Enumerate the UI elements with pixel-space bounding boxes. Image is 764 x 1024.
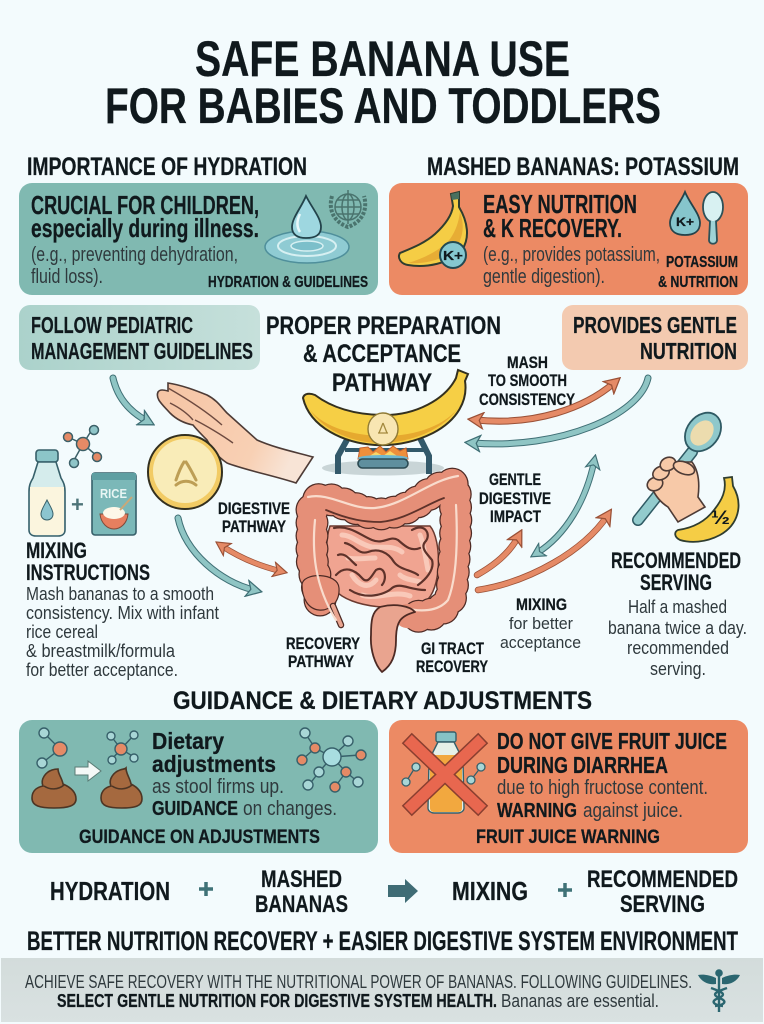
- icon: hand: [157, 383, 313, 483]
- warning text: DURING DIARRHEA: [497, 752, 668, 778]
- plus sign: +: [71, 492, 84, 517]
- heading: pathway: PATHWAY: [332, 369, 432, 397]
- arrow: nutrition return: [473, 378, 648, 444]
- mixing instructions heading: MIXING: [26, 538, 87, 563]
- hydration caption: HYDRATION & GUIDELINES: [208, 274, 368, 291]
- formula: mixing: MIXING: [452, 876, 528, 906]
- icon: hand with spoon: [638, 406, 739, 542]
- callout: follow pediatric guidelines: [19, 305, 260, 370]
- mixing instructions text: consistency. Mix with infant: [26, 602, 219, 623]
- spoon: [638, 406, 729, 520]
- icon: molecule left of bottle: [402, 763, 420, 786]
- small intestine: [327, 526, 438, 607]
- label: GI tract recovery: GI TRACT: [421, 640, 484, 658]
- icon: molecule right of bottle: [467, 763, 485, 784]
- warning text: [497, 728, 727, 822]
- icon: spoon: [703, 192, 723, 244]
- footer text: Bananas are essential.: [501, 991, 659, 1011]
- label: mash to smooth: TO SMOOTH: [488, 372, 567, 390]
- footer text: SELECT GENTLE NUTRITION FOR DIGESTIVE SYSTEM HEALTH.: [57, 991, 497, 1011]
- mixing instructions text: for better acceptance.: [26, 659, 178, 680]
- footer band: [1, 958, 763, 1022]
- callout: provides gentle nutrition: NUTRITION: [640, 338, 737, 364]
- heading: importance of hydration: IMPORTANCE OF HYDRATION: [27, 153, 307, 181]
- mixing instructions heading: [26, 538, 150, 585]
- arrow: slice to intestine: [178, 518, 254, 590]
- warning text: against juice.: [583, 800, 683, 822]
- label: recovery pathway: RECOVERY: [286, 635, 360, 653]
- callout: follow pediatric guidelines: FOLLOW PEDIATRIC: [31, 312, 193, 338]
- warning caption: FRUIT JUICE WARNING: [476, 827, 660, 848]
- icon: stool before: [32, 769, 76, 808]
- formula: hydration: HYDRATION: [50, 876, 170, 906]
- arrow: digestive pathway: [222, 546, 280, 571]
- icon: molecule small right: [107, 731, 138, 764]
- mixing instructions text: Mash bananas to a smooth: [26, 583, 214, 604]
- label: gentle digestive impact: GENTLE: [489, 471, 541, 489]
- label: recovery pathway: PATHWAY: [288, 653, 354, 671]
- heading: guidance: GUIDANCE & DIETARY ADJUSTMENTS: [173, 687, 592, 715]
- dietary text: [152, 728, 337, 820]
- icon: molecule network: [297, 728, 366, 792]
- arrow: gentle impact: [477, 537, 518, 575]
- dietary text: adjustments: [152, 751, 276, 777]
- potassium headline: [483, 189, 637, 243]
- icon: white arrow: [75, 761, 101, 781]
- banana slice: [368, 413, 398, 445]
- callout: follow pediatric guidelines: MANAGEMENT GUIDELINES: [31, 338, 253, 364]
- formula: mashed bananas: BANANAS: [255, 891, 348, 918]
- formula: recommended serving: SERVING: [620, 891, 705, 918]
- label: gentle digestive impact: [479, 471, 551, 526]
- callout: provides gentle nutrition: [562, 305, 748, 370]
- recommended serving text: recommended: [627, 637, 729, 658]
- arrow: guidelines to slice: [113, 378, 147, 421]
- icon: banana with potassium badge: K+: [443, 248, 463, 263]
- potassium caption: POTASSIUM: [666, 254, 738, 271]
- footer text: [25, 972, 692, 1011]
- icon: molecule: [64, 426, 102, 468]
- dietary caption: GUIDANCE ON ADJUSTMENTS: [79, 827, 320, 848]
- formula: recommended serving: [587, 866, 738, 918]
- potassium caption: [658, 254, 738, 291]
- arrow: mash double headed: [476, 383, 614, 421]
- label: mash to smooth: MASH: [507, 354, 548, 372]
- burner stand: [322, 438, 444, 476]
- icon: potassium drop: [670, 192, 700, 235]
- icon: banana slice: [148, 435, 222, 509]
- arrow: serving double headed: [537, 462, 594, 553]
- panel: hydration: [19, 183, 378, 295]
- potassium headline: & K RECOVERY.: [483, 213, 622, 243]
- icon: molecule small left: [37, 728, 67, 768]
- arrow: mixing: [478, 516, 607, 590]
- potassium headline: EASY NUTRITION: [483, 189, 637, 219]
- label: digestive pathway: PATHWAY: [222, 518, 286, 536]
- hydration headline: [31, 190, 259, 243]
- dietary text: Dietary: [152, 728, 224, 754]
- icon: milk bottle: [29, 450, 65, 536]
- icon: rice cereal box: [92, 473, 136, 535]
- panel: mashed bananas: [389, 183, 748, 295]
- icon: caduceus: [698, 970, 740, 1012]
- banana shading: [310, 405, 460, 443]
- large intestine: [308, 476, 458, 616]
- warning text: due to high fructose content.: [497, 777, 708, 799]
- title: SAFE BANANA USE: [195, 31, 570, 87]
- heading: pathway: [266, 312, 501, 397]
- icon: banana with potassium badge: [399, 192, 467, 268]
- arrow: [388, 879, 418, 903]
- icon: intestines: [302, 476, 458, 672]
- label: gentle digestive impact: IMPACT: [490, 508, 541, 526]
- plus sign: [199, 882, 213, 896]
- appendix: [333, 606, 341, 625]
- recommended serving text: Half a mashed: [628, 596, 727, 617]
- dietary text: GUIDANCE: [152, 798, 238, 820]
- label: mash to smooth: CONSISTENCY: [479, 391, 575, 409]
- label: gentle digestive impact: DIGESTIVE: [479, 490, 551, 508]
- heading: pathway: & ACCEPTANCE: [303, 340, 461, 368]
- banana: [303, 370, 468, 445]
- label: GI tract recovery: RECOVERY: [416, 658, 488, 676]
- label: mash to smooth: [479, 354, 575, 409]
- label: mixing for better acceptance: acceptance: [500, 633, 581, 652]
- potassium body text: (e.g., provides potassium,: [483, 244, 660, 266]
- dietary text: as stool firms up.: [152, 776, 284, 798]
- label: mixing for better acceptance: MIXING: [516, 596, 567, 614]
- plus sign: [558, 883, 572, 897]
- icon: water drop with ripples: [265, 196, 349, 263]
- recommended serving text: serving.: [650, 658, 706, 679]
- label: mixing for better acceptance: for better: [509, 614, 573, 633]
- potassium caption: & NUTRITION: [658, 274, 738, 291]
- hydration body text: fluid loss).: [31, 266, 103, 288]
- mixing instructions text: rice cereal: [26, 621, 98, 642]
- label: digestive pathway: [218, 500, 290, 536]
- hydration headline: especially during illness.: [31, 213, 259, 243]
- heading: pathway: PROPER PREPARATION: [266, 312, 501, 340]
- label: recovery pathway: [286, 635, 360, 671]
- hydration headline: CRUCIAL FOR CHILDREN,: [31, 190, 259, 220]
- cecum: [302, 576, 339, 610]
- colon highlight: [314, 520, 336, 620]
- icon: potassium drop: K+: [676, 215, 694, 229]
- arrows: [113, 378, 648, 590]
- icon: stool after: [101, 768, 142, 808]
- recommended serving heading: [611, 548, 741, 595]
- hydration body text: [31, 244, 238, 288]
- icon: WHO emblem: [331, 190, 365, 227]
- half banana: ½: [711, 508, 730, 529]
- fist: [645, 455, 705, 522]
- icon: rice cereal box: RICE: [100, 486, 127, 501]
- label: GI tract recovery: [416, 640, 488, 676]
- mixing instructions heading: INSTRUCTIONS: [26, 560, 150, 585]
- hydration body text: (e.g., preventing dehydration,: [31, 244, 238, 266]
- formula: mashed bananas: MASHED: [261, 866, 342, 893]
- formula: mashed bananas: [255, 866, 348, 918]
- recommended serving heading: SERVING: [640, 570, 712, 595]
- potassium body text: [483, 244, 660, 288]
- dietary text: on changes.: [243, 798, 337, 820]
- mixing instructions text: & breastmilk/formula: [26, 640, 176, 661]
- potassium body text: gentle digestion).: [483, 266, 605, 288]
- icon: banana on burner: [303, 370, 468, 476]
- formula row: [50, 866, 738, 918]
- panel: dietary adjustments: [19, 720, 378, 853]
- mixing instructions text: [26, 583, 219, 680]
- warning text: WARNING: [497, 800, 577, 822]
- label: digestive pathway: DIGESTIVE: [218, 500, 290, 518]
- title: [105, 31, 661, 134]
- icon: crossed out juice bottle: [412, 732, 478, 813]
- label: mixing for better acceptance: [500, 596, 581, 652]
- panel: fruit juice warning: [389, 720, 748, 853]
- rectum: [371, 605, 415, 672]
- recommended serving text: [608, 596, 747, 679]
